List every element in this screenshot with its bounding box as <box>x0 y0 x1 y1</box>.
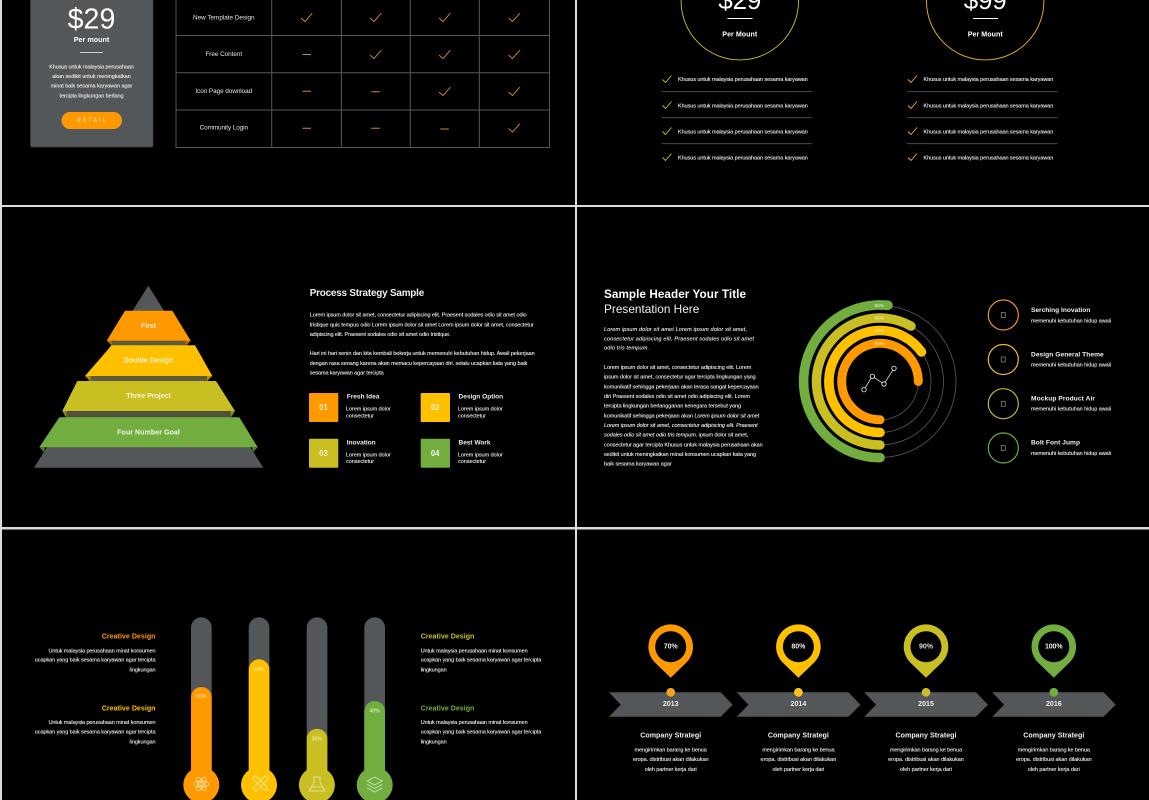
body text: consectetur agar tercipta Khusus untuk malaysia perusahaan akan <box>604 442 763 448</box>
thermometer 30%: 30% <box>312 736 322 742</box>
milestone 2016: eropa. distribusi akan dilakukan <box>1016 757 1092 763</box>
text block: green creative design: lingkungan <box>421 739 447 745</box>
text block: yellow creative design: ucapkan yang baik sesama karyawan agar tercipta <box>35 730 156 736</box>
layer: Four Number Goal: Four Number Goal <box>117 428 180 436</box>
radial chart <box>804 303 956 458</box>
item 02 Design Option <box>421 393 503 422</box>
legend: Design General Theme: memenuhi kebutuhan hidup awali <box>1031 363 1111 369</box>
text block: olive creative design: lingkungan <box>421 667 447 673</box>
milestone 2015: oleh partner kerja dari <box>900 767 952 773</box>
process paragraphs: Lorem ipsum dolor sit amet, consectetur adipiscing elit. Praesent sodales odio sit amet odio <box>310 312 527 318</box>
legend: Serching Inovation <box>988 300 1111 330</box>
price circle 99 <box>926 0 1044 60</box>
text block: green creative design: Untuk malaysia perusahaan minat konsumen <box>421 720 528 726</box>
italic intro: consectetur adipiscing elit. Praesent sodales odio sit amet <box>604 336 754 342</box>
thermometer 40% <box>357 617 393 800</box>
item 01 Fresh Idea: Lorem ipsum dolor <box>346 407 391 413</box>
milestone 2016: oleh partner kerja dari <box>1028 767 1080 773</box>
icon: layers <box>367 777 382 792</box>
milestone 2015: mengirimkan barang ke benua <box>890 748 963 754</box>
panel: radial progress <box>577 207 1149 527</box>
legend: Design General Theme: Design General Theme <box>1031 351 1104 358</box>
icon: line graph <box>862 366 896 392</box>
icon: pencil and ruler <box>252 776 268 791</box>
layer: First <box>107 311 191 341</box>
legend: Mockup Product Air <box>988 389 1111 419</box>
milestone 2014: eropa. distribusi akan dilakukan <box>761 757 836 763</box>
feature list right: Khusus untuk malaysia perusahaan sesama karyawan <box>924 130 1053 136</box>
price circle 99: Per Mount <box>968 31 1003 39</box>
body text: diri Praesent sodales odio sit amet odio adipiscing elit. Lorem <box>604 394 750 400</box>
milestone 2013: oleh partner kerja dari <box>645 767 697 773</box>
feature list right: Khusus untuk malaysia perusahaan sesama karyawan <box>924 156 1053 162</box>
text block: olive creative design <box>421 633 542 673</box>
legend: Mockup Product Air: Mockup Product Air <box>1031 395 1095 402</box>
process paragraphs <box>310 312 535 376</box>
text block: olive creative design: Creative Design <box>421 633 474 641</box>
legend: Serching Inovation: Serching Inovation <box>1031 307 1090 314</box>
italic intro: odio tris tempum. <box>604 346 649 352</box>
pyramid chart <box>34 286 263 468</box>
item 04 Best Work <box>421 439 503 468</box>
item 03 Inovation <box>309 439 391 468</box>
milestone 2015: eropa. distribusi akan dilakukan <box>888 757 964 763</box>
thermometer 50%: 50% <box>196 694 207 700</box>
header: Presentation Here <box>604 302 700 316</box>
radial chart: 50% <box>875 303 884 308</box>
milestone 2015 <box>864 624 988 773</box>
radial chart: 60% <box>875 316 884 321</box>
pricing card: Per mount <box>74 35 110 44</box>
milestone 2015: 2015 <box>918 701 934 708</box>
item 02 Design Option: Design Option <box>458 394 503 401</box>
header <box>604 288 746 316</box>
item 04 Best Work: Best Work <box>458 439 491 446</box>
feature list right: Khusus untuk malaysia perusahaan sesama karyawan <box>924 104 1053 110</box>
body text: ipsum dolor sit amet, consectetur agar tercipta lingkungan yang <box>604 375 756 381</box>
body text: komunikatif sehingga pekerjaan akan terasa sangat kepercayaan <box>604 384 759 390</box>
feature list right: Khusus untuk malaysia perusahaan sesama karyawan <box>924 77 1053 83</box>
pricing card: DETAIL <box>77 118 106 124</box>
item 04 Best Work: Lorem ipsum dolor <box>458 452 503 458</box>
text block: olive creative design: Untuk malaysia perusahaan minat konsumen <box>421 648 528 654</box>
feature list left: Khusus untuk malaysia perusahaan sesama karyawan <box>678 156 808 162</box>
process paragraphs: adipiscing elit. Praesent sodales odio sit amet odio tristique. <box>310 332 451 338</box>
feature list left: Khusus untuk malaysia perusahaan sesama karyawan <box>678 130 808 136</box>
layer: Three Project: Three Project <box>126 392 171 400</box>
legend: Bolt Font Jump: memenuhi kebutuhan hidup awali <box>1031 451 1111 457</box>
feature list left <box>662 76 812 162</box>
pricing card: $29 <box>68 4 115 36</box>
comparison table: Community Login <box>200 125 248 132</box>
body text: komunikatif sehingga pekerjaan akan Lorem ipsum dolor sit amet <box>604 413 760 419</box>
legend: Design General Theme <box>988 344 1111 374</box>
item 02 Design Option: consectetur <box>458 413 486 419</box>
item 01 Fresh Idea: Fresh Idea <box>347 394 380 401</box>
text block: green creative design: ucapkan yang baik sesama karyawan agar tercipta <box>421 730 542 736</box>
process paragraphs: Hari ini hari senin dan kita kembali bekerja untuk memenuhi kebutuhan hidup. Awali pekerjaan <box>310 351 535 357</box>
italic intro <box>604 327 754 352</box>
process heading: Process Strategy Sample <box>310 288 425 299</box>
comparison table: Icon Page download <box>195 88 253 95</box>
panel: circular pricing <box>577 0 1149 205</box>
milestone 2016: mengirimkan barang ke benua <box>1018 748 1091 754</box>
legend: Mockup Product Air: memenuhi kebutuhan hidup awali <box>1031 407 1111 413</box>
text block: green creative design <box>421 704 542 745</box>
header: Sample Header Your Title <box>604 288 746 301</box>
comparison table: Free Content <box>205 51 242 58</box>
milestone 2013 <box>609 624 733 773</box>
layer: Three Project <box>62 381 235 411</box>
pricing card <box>30 0 153 147</box>
text block: olive creative design: ucapkan yang baik sesama karyawan agar tercipta <box>421 658 542 664</box>
item 03 Inovation: Inovation <box>347 439 376 446</box>
milestone 2013: Company Strategi <box>640 732 701 740</box>
comparison table: New Template Design <box>193 15 255 22</box>
item 01 Fresh Idea: consectetur <box>346 413 374 419</box>
layer: First: First <box>141 322 157 330</box>
item 04 Best Work: consectetur <box>458 459 486 465</box>
pricing card: minat baik sesama karyawan agar <box>51 84 133 90</box>
body text: sodales odio sit amet odio tris tempum. ipsum dolor sit amet, <box>604 433 749 439</box>
layer: Double Design: Double Design <box>124 357 173 365</box>
item 03 Inovation: consectetur <box>346 459 374 465</box>
text block: yellow creative design: lingkungan <box>130 739 156 745</box>
text block: yellow creative design <box>35 704 156 745</box>
pricing card: Khusus untuk malaysia perusahaan <box>49 65 134 71</box>
comparison table <box>176 0 550 148</box>
item 01 Fresh Idea: 01 <box>319 403 328 412</box>
milestone 2014 <box>737 624 860 773</box>
radial chart: 80% <box>875 341 884 346</box>
milestone 2016: 2016 <box>1046 701 1062 708</box>
text block: orange creative design: Creative Design <box>102 633 156 641</box>
process paragraphs: tristique quis tempus odio Lorem ipsum dolor sit amet Lorem ipsum dolor sit amet, consectetur <box>310 322 534 328</box>
panel: pricing table <box>2 0 575 205</box>
milestone 2013: mengirimkan barang ke benua <box>635 748 708 754</box>
body text: Lorem ipsum dolor sit amet, consectetur adipiscing elit. Praesent <box>604 423 758 429</box>
text block: orange creative design: Untuk malaysia perusahaan minat konsumen <box>48 648 156 654</box>
milestone 2016 <box>992 624 1116 773</box>
feature list left: Khusus untuk malaysia perusahaan sesama karyawan <box>678 77 808 83</box>
body text: Lorem ipsum dolor sit amet, consectetur adipiscing elit. Lorem <box>604 365 752 371</box>
pricing card: tercipta lingkungan berlang <box>60 94 124 100</box>
body text: baik sesama karyawan agar <box>604 462 672 468</box>
process paragraphs: sesama karyawan agar tercipta <box>310 370 385 376</box>
milestone 2015: 90% <box>919 643 934 650</box>
milestone 2013: eropa. distribusi akan dilakukan <box>633 757 709 763</box>
body text: tercipta lingkungan berlangganan kenegara tersebut yang <box>604 404 741 410</box>
thermometer 40%: 40% <box>369 708 380 714</box>
panel: thermometer chart <box>2 530 575 800</box>
item 02 Design Option: Lorem ipsum dolor <box>458 407 503 413</box>
panel: process strategy <box>2 207 575 527</box>
panel: timeline <box>577 530 1149 800</box>
milestone 2016: 100% <box>1045 643 1063 650</box>
milestone 2014: mengirimkan barang ke benua <box>762 748 835 754</box>
text block: yellow creative design: Untuk malaysia perusahaan minat konsumen <box>48 720 156 726</box>
milestone 2013: 2013 <box>663 701 679 708</box>
pricing card: akan sedikit untuk meningkatkan <box>52 74 131 80</box>
item 02 Design Option: 02 <box>431 403 440 412</box>
legend: Serching Inovation: memenuhi kebutuhan hidup awali <box>1031 318 1111 324</box>
icon: atom <box>194 776 209 792</box>
text block: orange creative design <box>35 633 156 673</box>
text block: green creative design: Creative Design <box>421 704 474 712</box>
item 01 Fresh Idea <box>309 393 391 422</box>
legend: Bolt Font Jump <box>988 433 1111 463</box>
price circle 29: Per Mount <box>722 31 758 39</box>
thermometer 60%: 60% <box>254 667 265 673</box>
layer: Double Design <box>85 345 212 376</box>
feature list right <box>907 76 1058 162</box>
item 03 Inovation: 03 <box>319 449 328 458</box>
thermometer 50% <box>183 617 219 800</box>
text block: orange creative design: ucapkan yang baik sesama karyawan agar tercipta <box>35 658 156 664</box>
milestone 2014: oleh partner kerja dari <box>772 767 824 773</box>
milestone 2014: 80% <box>791 643 806 650</box>
milestone 2014: Company Strategi <box>768 732 829 740</box>
milestone 2014: 2014 <box>791 701 806 708</box>
radial chart: 70% <box>875 328 884 333</box>
text block: orange creative design: lingkungan <box>130 667 156 673</box>
item 03 Inovation: Lorem ipsum dolor <box>346 452 391 458</box>
feature list left: Khusus untuk malaysia perusahaan sesama karyawan <box>678 104 808 110</box>
icon: flask <box>309 777 325 791</box>
thermometer 30% <box>299 617 335 800</box>
milestone 2013: 70% <box>664 643 678 650</box>
process paragraphs: dengan rasa senang karena akan memacu kepercayaan diri. selalu ucapkan kata yang baik <box>310 361 528 367</box>
layer: Four Number Goal <box>39 417 258 447</box>
body text <box>604 365 763 468</box>
body text: sedikit untuk meningkatkan minat konsumen ucapkan kata yang <box>604 452 756 458</box>
thermometer 60% <box>241 617 277 800</box>
price circle 29 <box>681 0 798 60</box>
milestone 2016: Company Strategi <box>1023 732 1084 740</box>
italic intro: Lorem ipsum dolor sit amet Lorem ipsum dolor sit amet, <box>604 327 747 333</box>
item 04 Best Work: 04 <box>431 449 440 458</box>
milestone 2015: Company Strategi <box>896 732 957 740</box>
text block: yellow creative design: Creative Design <box>102 704 156 712</box>
legend: Bolt Font Jump: Bolt Font Jump <box>1031 440 1080 447</box>
